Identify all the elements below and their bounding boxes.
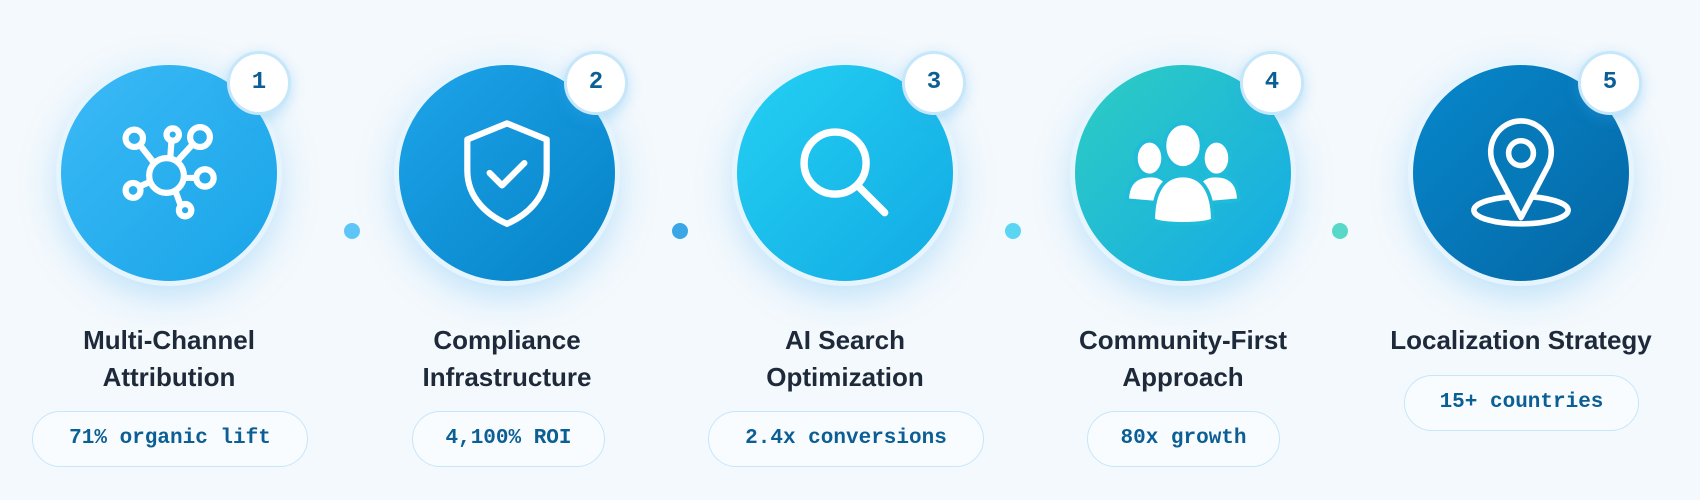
stat pill: [32, 411, 308, 467]
stat pill: 2.4x conversions: [745, 427, 947, 450]
badge 1: 1: [252, 69, 266, 96]
badge 3: 3: [927, 69, 941, 96]
title: [766, 325, 924, 392]
step 2: Compliance Infrastructure: [378, 48, 636, 467]
icon circle: location pin: [1413, 65, 1629, 281]
step 5: Localization Strategy: [1390, 48, 1652, 431]
badge 5: 5: [1603, 69, 1617, 96]
title: Infrastructure: [422, 362, 592, 392]
badge 1: [227, 51, 291, 115]
stat pill: 80x growth: [1120, 427, 1247, 450]
stat pill: [1404, 375, 1639, 431]
stat pill: [1087, 411, 1280, 467]
badge 4: 4: [1265, 69, 1279, 96]
step 3: AI Search Optimization: [708, 48, 984, 467]
icon circle: network: [61, 65, 277, 281]
stat pill: 4,100% ROI: [445, 427, 572, 450]
title: AI Search: [785, 325, 905, 355]
stat pill: [412, 411, 605, 467]
step 1: Multi-Channel Attribution: [32, 48, 308, 467]
title: Community-First: [1079, 325, 1287, 355]
title: [1079, 325, 1287, 392]
title: [422, 325, 592, 392]
badge 2: 2: [589, 69, 603, 96]
title: Localization Strategy: [1390, 325, 1652, 355]
stat pill: 15+ countries: [1440, 391, 1603, 414]
stat pill: [708, 411, 984, 467]
badge 4: [1240, 51, 1304, 115]
title: [83, 325, 255, 392]
title: Compliance: [433, 325, 581, 355]
connector dot 3: [1005, 223, 1021, 239]
badge 5: [1578, 51, 1642, 115]
icon circle: shield: [399, 65, 615, 281]
step 4: Community-First Approach: [1054, 48, 1312, 467]
title: Optimization: [766, 362, 924, 392]
connector dot 1: [344, 223, 360, 239]
badge 2: [564, 51, 628, 115]
title: Approach: [1122, 362, 1244, 392]
stat pill: 71% organic lift: [69, 427, 271, 450]
icon circle: magnifier: [737, 65, 953, 281]
connector dot 2: [672, 223, 688, 239]
icon circle: people: [1075, 65, 1291, 281]
badge 3: [902, 51, 966, 115]
title: Multi-Channel: [83, 325, 255, 355]
connector dot 4: [1332, 223, 1348, 239]
title: Attribution: [103, 362, 235, 392]
